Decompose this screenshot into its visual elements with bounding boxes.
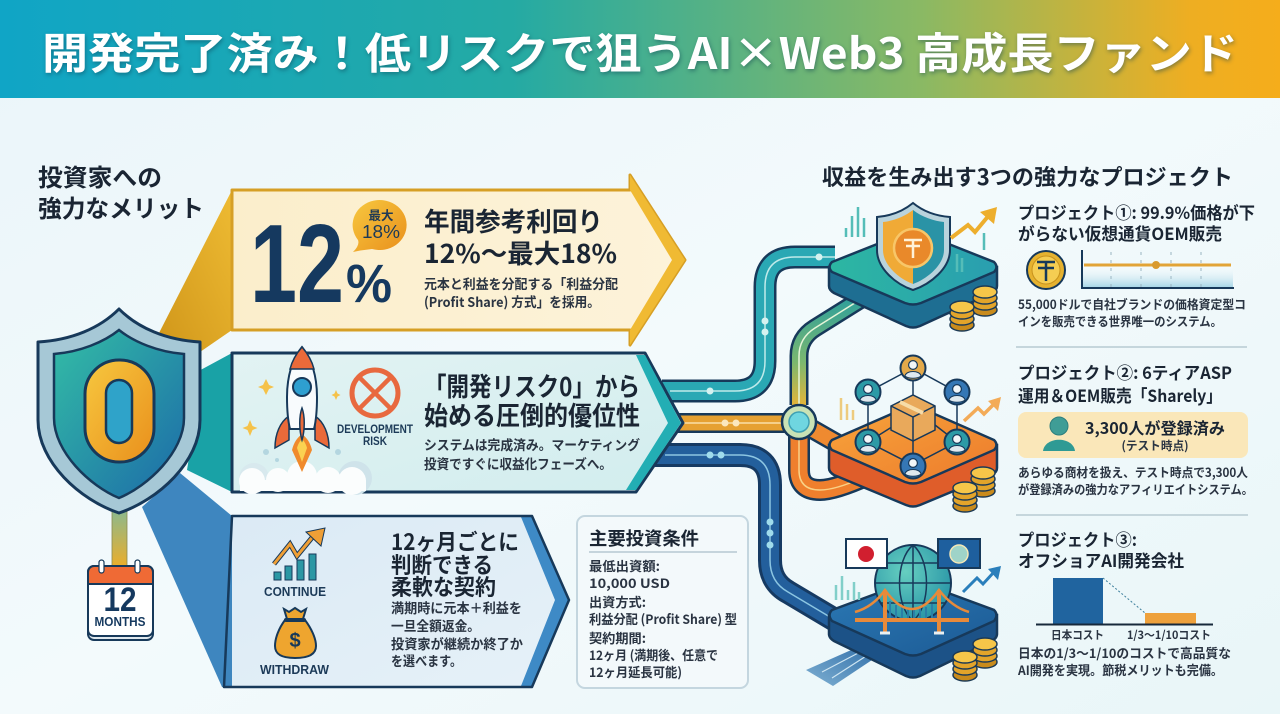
parcel box [891, 395, 935, 441]
panel: key investment terms: 利益分配 (Profit Share) 型 [589, 609, 737, 628]
small bars [841, 398, 853, 420]
risk description: 投資ですぐに収益化フェーズへ。 [424, 453, 612, 473]
project 1 heading: がらない仮想通貨OEM販売 [1018, 220, 1222, 245]
icon: withdraw money bag: WITHDRAW [260, 663, 329, 677]
growth arrow [963, 566, 1001, 592]
illustration: project 3 platform [806, 539, 1001, 686]
project 1 heading [1018, 199, 1255, 245]
max 18% bubble [353, 200, 407, 252]
panel: zero development risk [232, 347, 683, 495]
flag: Japan [846, 539, 887, 568]
bridge [855, 590, 969, 633]
outflow pipe [806, 643, 884, 686]
icon: continue growth chart: CONTINUE [264, 585, 326, 599]
growth arrow [951, 207, 997, 238]
project 2 description: あらゆる商材を扱え、テスト時点で3,300人 [1018, 462, 1248, 481]
coin stacks [953, 467, 995, 512]
blue wedge from shield [142, 473, 232, 687]
project 2 heading: プロジェクト②: 6ティアASP [1018, 359, 1232, 384]
icon: stable coin [1027, 251, 1065, 289]
big 12% figure: % [346, 254, 392, 314]
project 3 heading: プロジェクト③: [1018, 526, 1137, 551]
panel: key investment terms: 12ヶ月 (満期後、任意で [589, 645, 718, 664]
gold wedge from shield [158, 190, 232, 352]
contract description: を選べます。 [391, 650, 462, 670]
yield description: 元本と利益を分配する「利益分配 [424, 273, 618, 293]
panel: key investment terms [577, 516, 748, 688]
globe [875, 545, 951, 621]
max 18% bubble: 18% [362, 222, 400, 242]
green pipe [799, 298, 863, 405]
project 3 description [1017, 643, 1231, 679]
risk heading: 「開発リスク0」から [424, 367, 640, 404]
project 2 heading [1018, 359, 1232, 407]
yield heading [424, 202, 617, 271]
project 3 heading [1018, 526, 1184, 572]
project 3 description: AI開発を実現。節税メリットも完備。 [1017, 660, 1223, 679]
shield icon [877, 203, 950, 290]
icon: 12 months calendar: MONTHS [94, 614, 146, 629]
orange pipe [799, 425, 868, 490]
title: 開発完了済み！低リスクで狙うAI×Web3 高成長ファンド [42, 20, 1238, 82]
icon: 12 months calendar: 12 [104, 581, 136, 619]
contract heading: 12ヶ月ごとに [391, 525, 519, 557]
callout: registered users [1018, 412, 1248, 458]
project 1 description [1018, 294, 1246, 330]
project 1 description: インを販売できる世界唯一のシステム。 [1018, 311, 1222, 330]
icon: shield with zero [38, 309, 200, 513]
big 12% figure: 12 [250, 202, 344, 326]
network lines [868, 368, 957, 465]
project 3 description: 日本の1/3～1/10のコストで高品質な [1018, 643, 1231, 662]
coin stacks [953, 638, 997, 681]
pipe junction node [782, 405, 816, 439]
risk heading [424, 367, 640, 433]
panel: key investment terms: 主要投資条件 [589, 525, 699, 551]
right heading: three projects: 収益を生み出す3つの強力なプロジェクト [822, 160, 1233, 192]
project 2 description: が登録済みの強力なアフィリエイトシステム。 [1018, 479, 1253, 498]
risk description [424, 434, 640, 473]
project 2 text [1018, 359, 1253, 498]
flag: global [938, 539, 980, 568]
small bars [846, 207, 984, 272]
panel: key investment terms: 出資方式: [589, 592, 646, 611]
project 2 heading: 運用＆OEM販売「Sharely」 [1018, 382, 1222, 407]
growth arrow [964, 397, 1001, 421]
panel: key investment terms: 契約期間: [589, 628, 646, 647]
max 18% bubble: 最大 [368, 205, 394, 224]
project 1 description: 55,000ドルで自社ブランドの価格資定型コ [1018, 294, 1246, 313]
left heading: investor merits: 強力なメリット [38, 189, 204, 224]
cost comparison chart: 日本コスト [1051, 627, 1104, 643]
cost comparison chart: 1/3～1/10コスト [1127, 627, 1211, 643]
network people [856, 356, 970, 478]
icon: continue growth chart [264, 528, 326, 599]
yield heading: 12%～最大18% [424, 234, 617, 271]
icon: 12 months calendar [88, 560, 153, 640]
data pipes connecting panels to projects [655, 254, 868, 620]
project 1 heading: プロジェクト①: 99.9%価格が下 [1018, 199, 1255, 224]
risk heading: 始める圧倒的優位性 [424, 396, 640, 433]
contract heading [391, 525, 519, 602]
cost comparison chart [1036, 578, 1213, 643]
yield heading: 年間参考利回り [424, 202, 603, 239]
callout: registered users: (テスト時点) [1122, 437, 1188, 454]
panel: flexible contract [224, 516, 569, 687]
yield description [424, 273, 618, 311]
callout: registered users: 3,300人が登録済み [1085, 415, 1225, 439]
panel: yield arrow [232, 175, 685, 345]
gold pipe [675, 420, 790, 426]
teal pipe [662, 254, 835, 394]
yield description: (Profit Share) 方式」を採用。 [424, 291, 600, 311]
left heading: investor merits: 投資家への [38, 158, 162, 193]
icon: withdraw money bag [260, 608, 329, 677]
icon: crossed-out risk: DEVELOPMENT [337, 424, 413, 436]
header banner [0, 0, 1280, 98]
icon: withdraw money bag: $ [289, 630, 301, 652]
contract description: 投資家が継続か終了か [391, 633, 523, 653]
contract description: 一旦全額返金。 [391, 615, 480, 635]
project 2 description [1018, 462, 1253, 498]
contract heading: 判断できる [391, 548, 493, 580]
illustration: project 1 platform [829, 203, 997, 331]
panel: key investment terms: 12ヶ月延長可能) [589, 662, 682, 681]
icon: crossed-out risk [337, 370, 413, 448]
project 3 heading: オフショアAI開発会社 [1018, 547, 1184, 572]
risk description: システムは完成済み。マーケティング [424, 434, 640, 454]
project 1 text [1018, 199, 1255, 330]
contract description: 満期時に元本＋利益を [391, 597, 522, 617]
panel: key investment terms: 10,000 USD [589, 573, 670, 592]
stem to calendar [112, 510, 127, 566]
contract description [391, 597, 523, 670]
project 3 text [1017, 526, 1231, 679]
icon: crossed-out risk: RISK [363, 436, 388, 448]
price stability chart [1082, 250, 1234, 288]
illustration: project 2 platform [829, 356, 1001, 512]
contract heading: 柔軟な契約 [391, 570, 496, 602]
coin stacks [950, 286, 997, 331]
panel: key investment terms: 最低出資額: [589, 556, 660, 575]
blue pipe [655, 452, 835, 620]
icon: rocket launch [239, 347, 372, 495]
small bars [836, 576, 859, 600]
teal wedge from shield [187, 353, 232, 492]
left heading: investor merits [38, 158, 204, 224]
